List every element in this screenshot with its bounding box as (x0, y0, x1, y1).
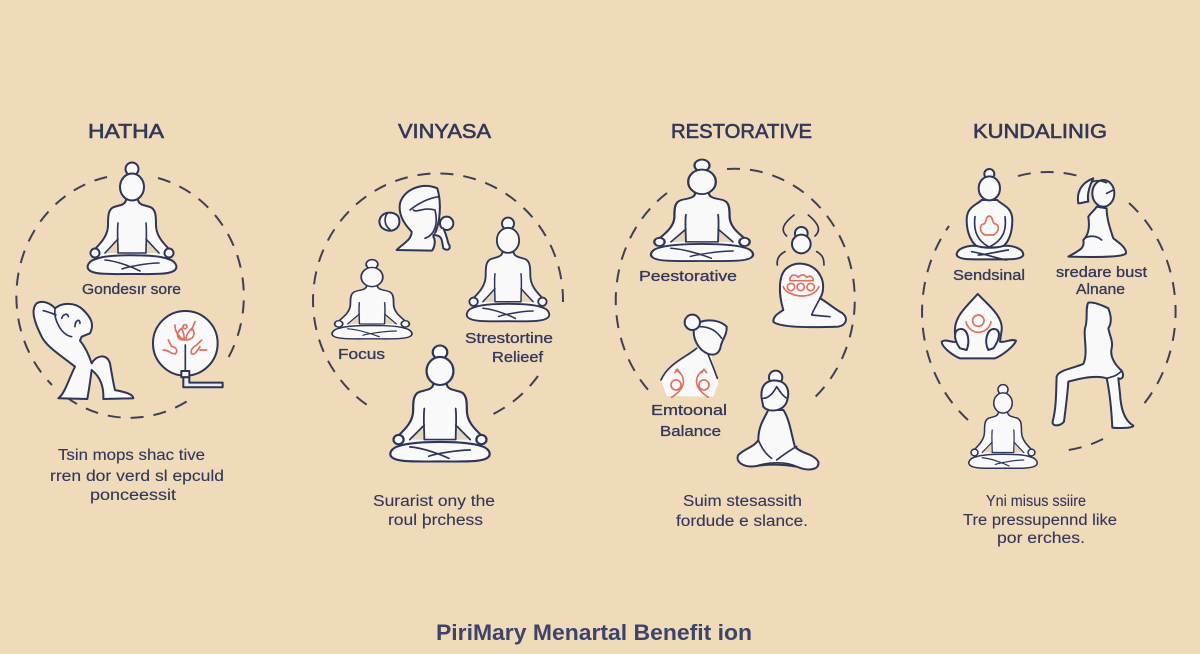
label: bust balance (1056, 265, 1147, 298)
footer title: PiriMary Menartal Benefit ion (436, 620, 752, 645)
body text: vinyasa: Surarist ony the (373, 493, 495, 510)
body text: vinyasa: roul þrchess (388, 512, 483, 529)
icon: figure with energy waves (773, 215, 846, 327)
dashed circle: hatha (16, 177, 244, 418)
icon: brain tree in circle (153, 311, 223, 387)
icon: head with hair buns (379, 186, 453, 251)
label: restorative: Peestorative (639, 269, 737, 285)
label: stress relief: Relieef (492, 350, 544, 366)
dashed circle: kundalini (922, 172, 1176, 451)
body text: kundalini: por erches. (997, 530, 1085, 547)
dashed circle: restorative (616, 169, 855, 400)
body text: kundalini: Tre pressupennd like (963, 512, 1117, 529)
label: bust balance: sredare bust (1056, 265, 1147, 281)
heading: kundalini: KUNDALINIG (973, 121, 1107, 143)
heading: vinyasa: VINYASA (398, 121, 492, 143)
label: emotional balance: Balance (660, 424, 721, 440)
heading: restorative: RESTORATIVE (671, 121, 812, 143)
body text: hatha: Tsin mops shac tive (58, 447, 205, 464)
label: stress relief: Strestortine (465, 331, 553, 347)
icon: seated restorative pose (651, 160, 753, 261)
icon: meditator with red lotus (957, 169, 1023, 260)
body text: hatha (50, 447, 224, 504)
body text: hatha: rren dor verd sl epculd (50, 468, 224, 485)
label: emotional balance: Emtoonal (651, 403, 727, 419)
icon: focus pose (332, 260, 412, 339)
label: bust balance: Alnane (1076, 282, 1125, 298)
label: stress relief (465, 331, 553, 366)
panel: restorative (616, 121, 855, 530)
icon: drop with hands (942, 294, 1016, 358)
icon: kneeling ponytail figure (1068, 178, 1126, 257)
icon: lower seated pose (738, 371, 818, 469)
label: focus: Focus (338, 347, 385, 363)
body text: vinyasa (373, 493, 495, 529)
body text: restorative (676, 493, 808, 530)
panel: vinyasa (313, 121, 563, 529)
icon: stress relief pose (467, 218, 549, 321)
panel: kundalini (922, 121, 1176, 547)
body text: kundalini: Yni misus ssiire (986, 493, 1086, 510)
body text: restorative: Suim stesassith (683, 493, 802, 510)
body text: restorative: fordude e slance. (676, 513, 808, 530)
label: sensational: Sendsinal (953, 268, 1025, 284)
icon: arm stretch figure (34, 302, 133, 399)
label: emotional balance (651, 403, 727, 440)
label: gondesir sore: Gondesır sore (82, 282, 181, 298)
icon: standing squat figure (1053, 302, 1133, 428)
body text: hatha: ponceessit (90, 487, 177, 504)
icon: lower meditator (969, 385, 1037, 468)
heading: hatha: HATHA (88, 121, 165, 143)
icon: shoulder bust with arrows (661, 315, 727, 397)
icon: large seated pose (390, 345, 490, 462)
panel: hatha (16, 121, 244, 504)
body text: kundalini (963, 493, 1117, 547)
dashed circle: vinyasa (313, 173, 563, 417)
icon: seated meditation pose (88, 162, 176, 274)
